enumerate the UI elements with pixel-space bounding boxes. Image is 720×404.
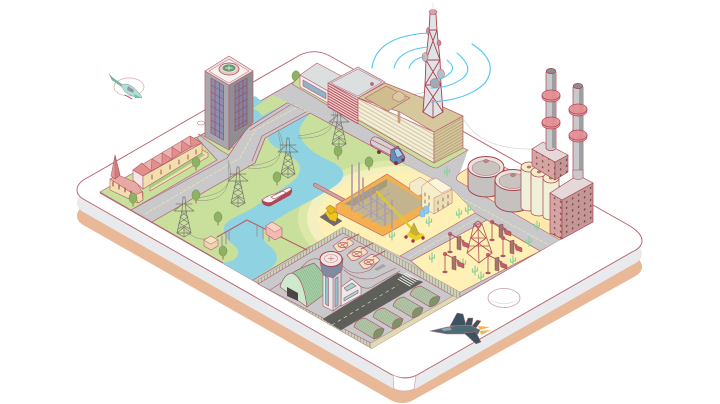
icon: bulldozer	[320, 205, 342, 226]
road: bridge span	[232, 103, 310, 163]
tablet screen face	[77, 52, 642, 378]
panel: oil field	[411, 220, 540, 296]
tree near church	[129, 193, 137, 206]
icon: helicopter	[109, 74, 144, 99]
icon: oil derrick	[467, 221, 492, 263]
speaker slot	[197, 121, 205, 125]
right window grid	[235, 78, 247, 131]
icon: control tower	[320, 252, 361, 311]
icon: crane	[377, 192, 425, 243]
home button	[488, 288, 520, 308]
icon: beige office block	[358, 83, 463, 163]
runway	[323, 273, 423, 330]
icon: fuel truck	[370, 137, 405, 165]
icon: radio signal arcs	[372, 33, 490, 102]
icon: houses	[410, 177, 452, 214]
icon: pipe	[315, 185, 345, 201]
icon: radio mast	[422, 3, 444, 118]
road: main avenue	[272, 92, 560, 256]
front fence	[371, 296, 458, 349]
map base	[100, 80, 568, 348]
icon: oil pumps	[442, 220, 522, 274]
icon: liquid tanks	[468, 156, 531, 212]
icon: chimney two	[569, 83, 587, 181]
road: western road with bend	[131, 103, 310, 222]
left window grid	[211, 78, 224, 140]
panel: construction pit	[336, 163, 432, 236]
tablet base shadow edge	[77, 78, 642, 403]
icon: small hangars	[354, 286, 440, 339]
icon: trees	[192, 71, 373, 259]
corner seam	[393, 375, 416, 391]
tower lawn	[198, 134, 240, 157]
icon: fighter jet	[430, 313, 491, 344]
icon: tall tower	[205, 56, 253, 150]
icon: low factory	[300, 63, 345, 103]
icon: power pylons and wires	[174, 92, 426, 239]
panel: side road	[400, 213, 487, 261]
tree by building	[192, 157, 200, 170]
panel: green land	[152, 113, 502, 280]
icon: pink louvred building	[328, 67, 385, 124]
panel: airfield	[258, 227, 460, 349]
panel: church land	[100, 137, 217, 210]
construction ground bands	[298, 160, 475, 256]
icon: large chimney base	[550, 170, 593, 239]
panel: upper river corner	[235, 96, 276, 128]
piles	[352, 163, 392, 228]
taxiway lines	[270, 259, 400, 290]
tablet side edge	[77, 65, 642, 391]
icon: large hangar	[280, 263, 328, 307]
icon: pier and hut	[204, 220, 307, 250]
tablet device	[77, 52, 642, 403]
icon: blue barrels	[420, 206, 429, 217]
icon: chimney one	[542, 68, 560, 150]
icon: cacti	[390, 167, 540, 281]
panel: industrial strip base	[292, 76, 468, 168]
icon: church	[110, 155, 143, 203]
icon: parked aircraft	[333, 234, 386, 271]
icon: small chimney base	[532, 142, 568, 180]
river	[222, 105, 343, 280]
fence	[258, 227, 460, 348]
tarmac	[258, 233, 453, 343]
panel: tank yard	[456, 160, 575, 240]
icon: silos	[521, 162, 559, 220]
icon: thin cable arc	[463, 118, 533, 149]
icon: long building	[133, 136, 208, 191]
icon: ship	[262, 188, 292, 206]
